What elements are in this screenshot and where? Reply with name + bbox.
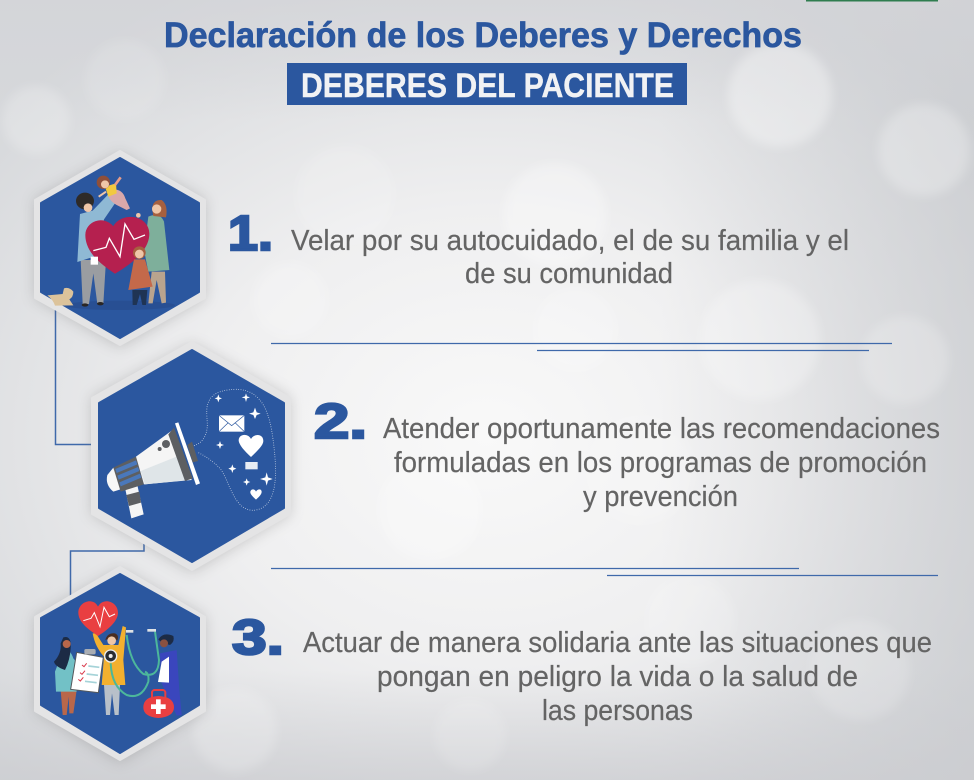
text 2: y prevención: [583, 481, 738, 513]
icon: family holding heart: [47, 176, 175, 310]
connector: hexagon 2 to 3: [70, 540, 144, 600]
hexagon 2: megaphone: [92, 342, 290, 572]
text 3: Actuar de manera solidaria ante las situaciones que: [303, 627, 932, 659]
text 2: Atender oportunamente las recomendaciones: [383, 413, 940, 445]
text 1: de su comunidad: [465, 258, 673, 290]
icon: medical team with heart and stethoscope: [54, 601, 182, 718]
text 3: las personas: [542, 695, 693, 727]
divider lines 2: [271, 568, 938, 576]
hexagon 3: medical team: [35, 567, 205, 762]
divider lines 1: [271, 344, 892, 350]
number 3: 3.: [232, 611, 284, 665]
icon: megaphone with messages: [107, 389, 276, 518]
hexagon 1: family: [35, 151, 205, 347]
top green bar: [806, 0, 938, 2]
title: Declaración de los Deberes y Derechos: [164, 16, 802, 55]
number 2: 2.: [314, 395, 367, 449]
number 1: 1.: [228, 207, 273, 261]
connector: hexagon 1 to 2: [56, 300, 100, 444]
item 3: [232, 611, 932, 727]
subtitle banner: DEBERES DEL PACIENTE: [301, 67, 674, 105]
text 1: Velar por su autocuidado, el de su familia y el: [291, 225, 849, 257]
text 2: formuladas en los programas de promoción: [394, 447, 927, 479]
item 1: [228, 207, 849, 290]
item 2: [314, 395, 940, 513]
text 3: pongan en peligro la vida o la salud de: [377, 661, 858, 693]
